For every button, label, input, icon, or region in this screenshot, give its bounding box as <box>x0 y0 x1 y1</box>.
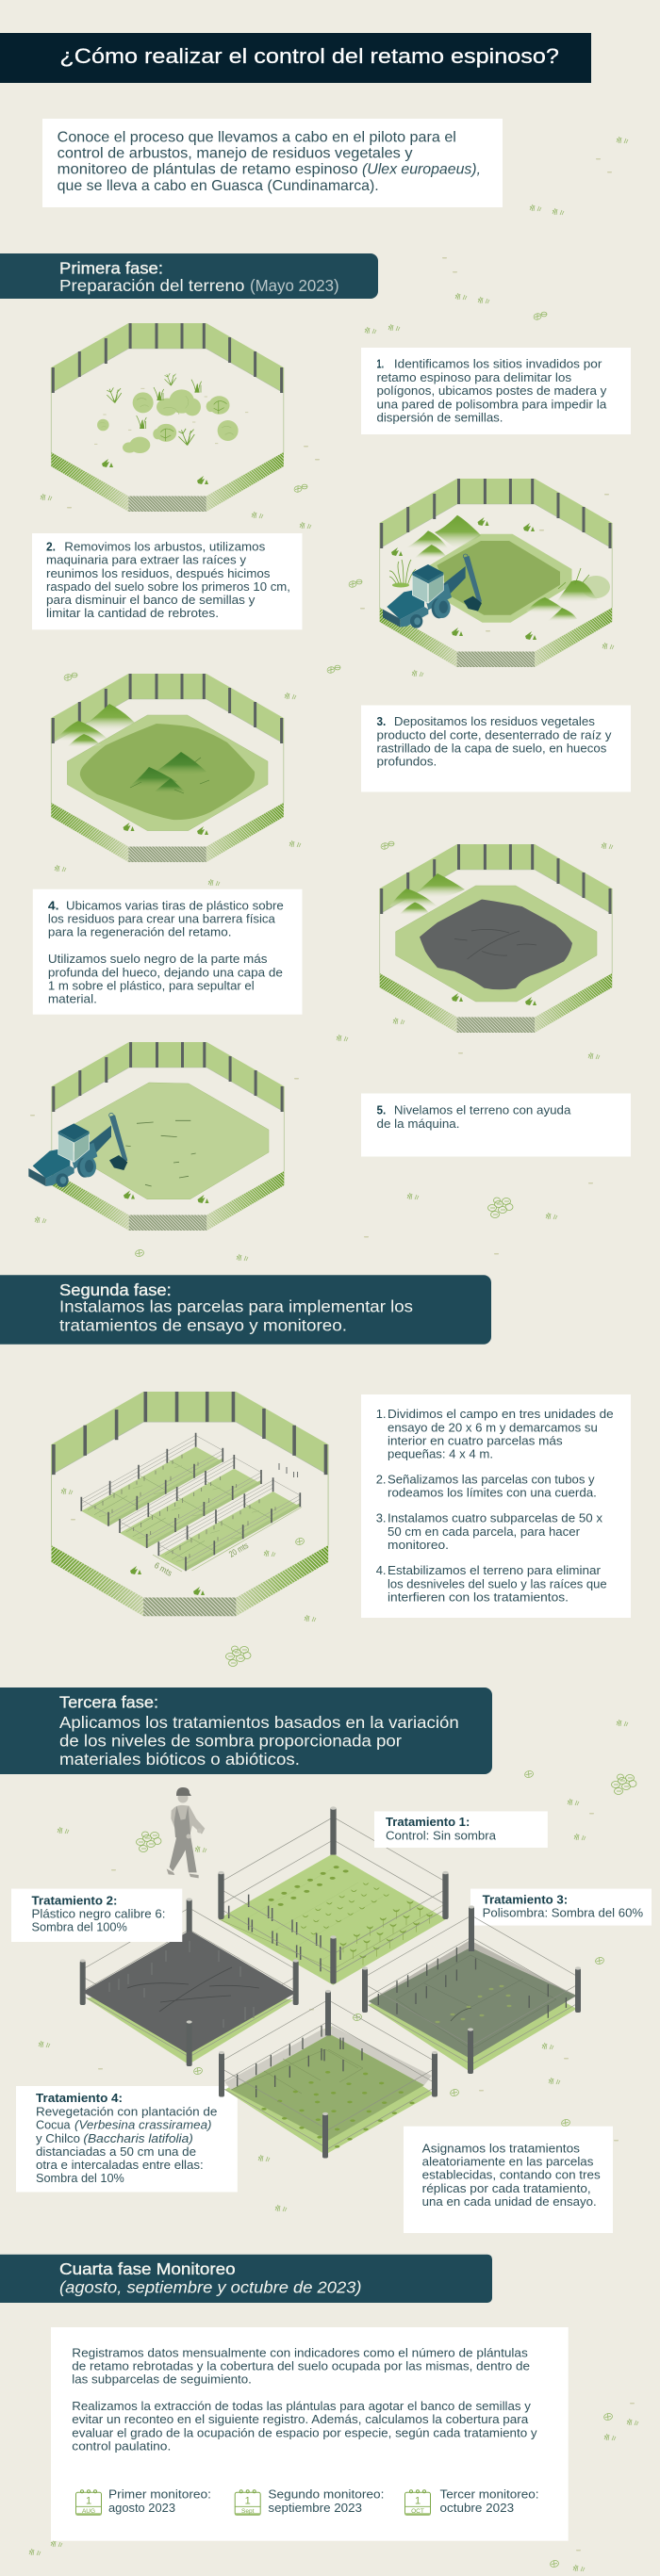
text: fase 2 steps: interfieren con los tratamientos. <box>388 1590 569 1604</box>
dimension 6 mts: 6 mts <box>153 1560 174 1578</box>
shrubs and plants <box>94 373 248 453</box>
text: tercer monitoreo: Tercer monitoreo: <box>439 2487 539 2502</box>
lower residue hills with bush <box>526 568 610 621</box>
text: monitoreo description: evaluar el grado de la ocupación de espacio por especie, según cada tratamiento y <box>72 2425 537 2439</box>
heading: tercera fase: Tercera fase: <box>59 1692 158 1711</box>
text: step 5 <box>361 1093 631 1157</box>
icon: calendar septiembre <box>235 2490 260 2515</box>
heading: tercera fase: Aplicamos los tratamientos basados en la variación <box>59 1713 459 1732</box>
label: tratamiento 4 box: distanciadas a 50 cm una de <box>36 2144 196 2159</box>
icon: calendar septiembre: 1 <box>245 2495 251 2506</box>
text: step 4: para la regeneración del retamo. <box>48 925 232 938</box>
text: fase 2 steps: pequeñas: 4 x 4 m. <box>388 1447 493 1461</box>
text: step 2 <box>32 533 302 629</box>
icon: calendar octubre <box>405 2490 430 2515</box>
intro text block: control de arbustos, manejo de residuos vegetales y <box>58 145 413 161</box>
heading: segunda fase: Instalamos las parcelas para implementar los <box>59 1297 413 1316</box>
text: tratamientos aleatorios: establecidas, contando con tres <box>422 2168 601 2182</box>
text: monitoreo description: de retamo rebrotadas y la cobertura del suelo ocupada por las mismas, dentro de <box>72 2358 530 2372</box>
heading: tercera fase: de los niveles de sombra proporcionada por <box>59 1732 402 1751</box>
text: step 4: material. <box>48 992 97 1006</box>
heading: primera fase: (Mayo 2023) <box>250 276 339 295</box>
text: primer monitoreo <box>108 2487 211 2515</box>
text: fase 2 steps: monitoreo. <box>388 1538 449 1552</box>
upper hills <box>55 704 135 747</box>
text: step 1: polígonos, ubicamos postes de madera y <box>377 383 607 398</box>
icon: calendar octubre: 1 <box>415 2495 421 2506</box>
label: tratamiento 2 box: Tratamiento 2: <box>32 1894 117 1908</box>
label: tratamiento 4 box: (Baccharis latifolia) <box>83 2131 193 2145</box>
upper residue hills <box>407 515 481 559</box>
intro text block: que se lleva a cabo en Guasca (Cundinamarca). <box>58 178 379 194</box>
text: monitoreo description: Registramos datos mensualmente con indicadores como el número de plántulas <box>72 2345 528 2359</box>
text: step 4: profunda del hueco, dejando una capa de <box>48 965 283 980</box>
heading: segunda fase: Segunda fase: <box>59 1280 172 1299</box>
icon: calendar agosto: 1 <box>86 2495 91 2506</box>
icon: farmer walking <box>167 1787 205 1878</box>
label: tratamiento 1 box: Tratamiento 1: <box>386 1815 470 1829</box>
chart plot: tratamiento 1 control <box>218 1806 449 1985</box>
title bar <box>0 33 591 83</box>
heading: primera fase <box>0 253 378 299</box>
text: segundo monitoreo <box>268 2487 384 2515</box>
text: step 4: 4. <box>48 898 58 912</box>
label: tratamiento 4 box: Sombra del 10% <box>36 2171 124 2185</box>
heading: primera fase: Preparación del terreno <box>59 276 244 295</box>
text: step 2: 2. <box>46 539 56 553</box>
heading: cuarta fase <box>0 2255 492 2303</box>
intro text block: Conoce el proceso que llevamos a cabo en el piloto para el <box>58 129 456 145</box>
text: step 3 <box>361 705 631 791</box>
text: step 2: reunimos los residuos, después hicimos <box>46 566 271 580</box>
text: tercer monitoreo <box>439 2487 539 2515</box>
text: fase 2 steps: Dividimos el campo en tres unidades de <box>388 1407 614 1421</box>
text: fase 2 steps: Señalizamos las parcelas con tubos y <box>388 1472 595 1486</box>
text: fase 2 steps: 50 cm en cada parcela, para hacer <box>388 1524 581 1539</box>
heading: cuarta fase: Cuarta fase Monitoreo <box>59 2259 236 2278</box>
text: tratamientos aleatorios: aleatoriamente en las parcelas <box>422 2155 594 2169</box>
text: fase 2 steps: 4. <box>376 1563 387 1577</box>
text: step 2: para disminuir el banco de semillas y <box>46 593 256 607</box>
text: tercer monitoreo: octubre 2023 <box>439 2501 514 2515</box>
sprouts and stakes <box>238 2026 415 2148</box>
text: step 1: retamo espinoso para delimitar los <box>377 370 572 384</box>
plot strips <box>81 1433 300 1571</box>
label: tratamiento 3 box <box>470 1889 652 1926</box>
text: step 4 <box>33 889 303 1015</box>
text: tratamientos aleatorios: Asignamos los tratamientos <box>422 2141 581 2155</box>
icon: calendar septiembre: Sept <box>241 2508 255 2515</box>
text: segundo monitoreo: septiembre 2023 <box>268 2501 362 2515</box>
central hills <box>130 752 209 793</box>
label: tratamiento 1 box <box>374 1811 548 1848</box>
text: primer monitoreo: Primer monitoreo: <box>108 2487 211 2502</box>
text: tratamientos aleatorios: réplicas por cada tratamiento, <box>422 2181 591 2195</box>
text: step 4: los residuos para crear una barrera física <box>48 912 276 926</box>
heading: tercera fase <box>0 1687 492 1774</box>
grass clump <box>389 560 416 588</box>
text: step 1: Identificamos los sitios invadidos por <box>394 357 602 371</box>
upper hills <box>389 873 465 915</box>
text: monitoreo description: las subparcelas de seguimiento. <box>72 2372 252 2387</box>
chart plot: tratamiento 2 plastic <box>80 1898 299 2066</box>
dimension 6 mts <box>153 1555 182 1578</box>
text: tratamientos aleatorios: una en cada unidad de ensayo. <box>422 2194 597 2209</box>
text: primer monitoreo: agosto 2023 <box>108 2501 175 2515</box>
text: fase 2 steps: Instalamos cuatro subparcelas de 50 x <box>388 1511 603 1525</box>
intro text block: monitoreo de plántulas de retamo espinoso <box>58 161 358 177</box>
text: monitoreo description <box>72 2345 537 2454</box>
label: tratamiento 4 box: (Verbesina crassiramea) <box>74 2118 211 2132</box>
dimension 20 mts <box>192 1508 302 1571</box>
text: fase 2 steps: los desniveles del suelo y las raíces que <box>388 1576 607 1590</box>
icon: calendar agosto: AUG <box>82 2508 95 2515</box>
text: segundo monitoreo: Segundo monitoreo: <box>268 2487 384 2502</box>
label: tratamiento 4 box: Revegetación con plantación de <box>36 2104 217 2118</box>
text: step 1 <box>361 348 631 434</box>
text: step 1: una pared de polisombra para impedir la <box>377 398 607 411</box>
illustration: step 5 levelled field with backhoe <box>28 1042 284 1231</box>
chart plot: tratamiento 4 revegetation <box>219 1990 437 2158</box>
text: step 1: 1. <box>377 357 384 371</box>
label: tratamiento 4 box: Tratamiento 4: <box>36 2091 123 2105</box>
intro text block: (Ulex europaeus), <box>362 161 481 177</box>
icon: calendar octubre: OCT <box>411 2508 424 2515</box>
label: tratamiento 4 box: otra e intercaladas entre ellas: <box>36 2158 204 2172</box>
label: tratamiento 4 box: y Chilco <box>36 2131 80 2145</box>
text: step 5: de la máquina. <box>377 1117 460 1131</box>
text: fase 2 steps <box>361 1394 631 1618</box>
illustration: step 3 field with pit <box>51 674 284 862</box>
text: step 3: 3. <box>377 714 386 728</box>
heading: primera fase: Primera fase: <box>59 259 163 278</box>
dimension 20 mts: 20 mts <box>227 1541 250 1559</box>
heading: tercera fase: materiales bióticos o abióticos. <box>59 1750 300 1769</box>
label: tratamiento 1 box: Control: Sin sombra <box>386 1828 497 1842</box>
text: step 5: Nivelamos el terreno con ayuda <box>394 1103 571 1117</box>
illustration: step 2 field with backhoe <box>380 479 612 667</box>
heading: cuarta fase: (agosto, septiembre y octubre de 2023) <box>59 2278 362 2297</box>
text: step 2: limitar la cantidad de rebrotes. <box>46 606 219 620</box>
chart plot: tratamiento 3 shade net <box>362 1905 581 2074</box>
text: step 2: Removimos los arbustos, utilizamos <box>64 539 266 553</box>
text: step 4: 1 m sobre el plástico, para sepultar el <box>48 978 255 992</box>
text: fase 2 steps: Estabilizamos el terreno para eliminar <box>388 1563 602 1577</box>
heading: segunda fase <box>0 1275 491 1345</box>
panel: monitoreo <box>51 2327 569 2541</box>
text: monitoreo description: control paulatino. <box>72 2439 171 2454</box>
text: step 3: producto del corte, desenterrado de raíz y <box>377 727 612 742</box>
text: step 4: Utilizamos suelo negro de la parte más <box>48 952 268 966</box>
label: tratamiento 4 box <box>16 2086 238 2192</box>
text: monitoreo description: Realizamos la extracción de todas las plántulas para agotar el banco de semillas y <box>72 2399 531 2413</box>
text: step 2: maquinaria para extraer las raíces y <box>46 553 247 567</box>
text: step 3: profundos. <box>377 755 437 769</box>
text: fase 2 steps: 3. <box>376 1511 387 1525</box>
title bar: ¿Cómo realizar el control del retamo espinoso? <box>59 44 559 68</box>
text: fase 2 steps: 1. <box>376 1407 387 1421</box>
text: step 2: raspado del suelo sobre los primeros 10 cm, <box>46 579 290 594</box>
text: step 3: rastrillado de la capa de suelo, en huecos <box>377 741 607 755</box>
illustration: trial plots field <box>51 1392 328 1616</box>
heading: segunda fase: tratamientos de ensayo y monitoreo. <box>59 1315 347 1334</box>
label: tratamiento 2 box <box>11 1889 182 1942</box>
text: tratamientos aleatorios <box>404 2127 613 2233</box>
text: fase 2 steps: interior en cuatro parcelas más <box>388 1433 563 1447</box>
label: tratamiento 2 box: Plástico negro calibre 6: <box>32 1906 166 1920</box>
text: step 3: Depositamos los residuos vegetales <box>394 714 595 728</box>
label: tratamiento 4 box: Cocua <box>36 2118 71 2132</box>
label: tratamiento 3 box: Tratamiento 3: <box>483 1892 568 1906</box>
text: monitoreo description: evitar un reconteo en el siguiente registro. Además, calculamos la cobertura para <box>72 2412 529 2426</box>
text: step 1: dispersión de semillas. <box>377 410 503 424</box>
text: step 4: Ubicamos varias tiras de plástico sobre <box>66 898 284 912</box>
seeds and sprouts <box>229 1866 433 1971</box>
label: tratamiento 3 box: Polisombra: Sombra del 60% <box>483 1905 644 1919</box>
intro text block <box>42 119 503 207</box>
label: tratamiento 2 box: Sombra del 100% <box>32 1920 127 1934</box>
text: fase 2 steps: 2. <box>376 1472 387 1486</box>
text: fase 2 steps: rodeamos los límites con una cuerda. <box>388 1486 597 1500</box>
text: step 5: 5. <box>377 1103 386 1117</box>
text: fase 2 steps: ensayo de 20 x 6 m y demarcamos su <box>388 1420 598 1434</box>
icon: calendar agosto <box>75 2490 102 2515</box>
illustration: step 1 field with shrubs <box>51 323 284 512</box>
illustration: step 4 field with black plastic <box>380 844 612 1033</box>
